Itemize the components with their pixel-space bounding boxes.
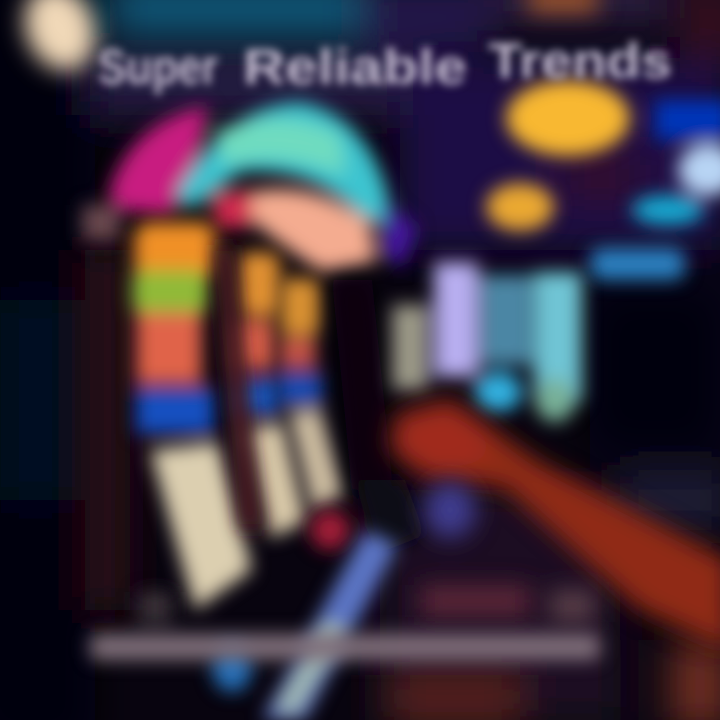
title: Super — [98, 39, 218, 95]
title: Reliable — [243, 39, 467, 95]
slot machine — [82, 102, 425, 610]
right reel — [278, 278, 344, 510]
caption bar — [90, 592, 600, 660]
left reel — [132, 222, 252, 610]
middle reel — [234, 252, 306, 538]
machine arch — [82, 102, 418, 272]
title: Trends — [488, 33, 672, 89]
title — [98, 33, 672, 95]
lower details — [420, 482, 595, 622]
arm — [390, 398, 720, 650]
reel dividers — [214, 245, 425, 555]
diagonal coloured streak — [212, 530, 398, 720]
top-left cream light — [12, 0, 598, 82]
background machines — [392, 262, 582, 422]
ceiling lights — [486, 80, 720, 280]
